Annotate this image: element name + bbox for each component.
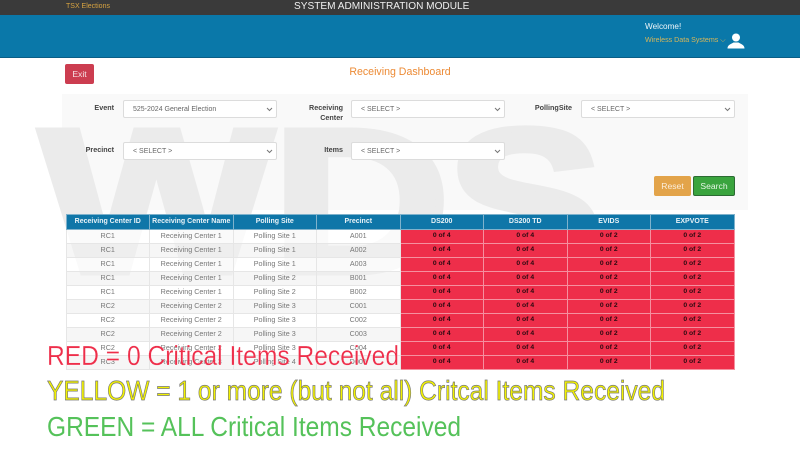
data table: Receiving Center Name — [152, 218, 230, 225]
data table: 0 of 2 — [683, 274, 701, 281]
data table: Polling Site 1 — [254, 259, 296, 268]
data table: 0 of 4 — [516, 330, 534, 337]
data table: 0 of 4 — [516, 260, 534, 267]
data table: Receiving Center 1 — [161, 245, 222, 254]
receiving center label: Receiving Center — [309, 103, 343, 122]
data table: 0 of 2 — [683, 302, 701, 309]
data table: 0 of 2 — [600, 330, 618, 337]
data table: 0 of 4 — [433, 344, 451, 351]
brand label: TSX Elections — [66, 3, 110, 10]
data table: 0 of 4 — [433, 260, 451, 267]
data table: B002 — [350, 287, 367, 296]
data table: Receiving Center 2 — [161, 315, 222, 324]
data table: Receiving Center 1 — [161, 231, 222, 240]
data table: 0 of 4 — [433, 302, 451, 309]
blue header band — [0, 15, 800, 58]
data table: 0 of 2 — [600, 260, 618, 267]
data table: 0 of 4 — [516, 316, 534, 323]
data table — [66, 214, 735, 370]
data table: EXPVOTE — [676, 218, 709, 225]
data table: Receiving Center 1 — [161, 287, 222, 296]
data table: Polling Site 3 — [254, 301, 296, 310]
data table: 0 of 2 — [600, 288, 618, 295]
items label: Items — [324, 145, 343, 154]
data table: 0 of 4 — [516, 232, 534, 239]
data table: 0 of 2 — [600, 232, 618, 239]
precinct label: Precinct — [86, 145, 114, 154]
data table: 0 of 4 — [516, 288, 534, 295]
data table: DS200 TD — [509, 218, 542, 225]
data table: 0 of 2 — [683, 288, 701, 295]
exit button — [65, 64, 94, 84]
data table: RC2 — [101, 329, 115, 338]
search button — [693, 176, 735, 196]
receiving center select: < SELECT > — [361, 106, 400, 113]
legend: red: RED = 0 Critical Items Received — [47, 340, 399, 371]
filter panel background — [62, 94, 748, 210]
data table: C002 — [350, 315, 367, 324]
filter: event — [94, 100, 735, 122]
event select: 525-2024 General Election — [133, 106, 216, 113]
data table: Polling Site 4 — [254, 357, 296, 366]
data table: Polling Site 3 — [254, 343, 296, 352]
precinct select — [123, 142, 277, 160]
data table: Receiving Center 1 — [161, 273, 222, 282]
data table: Polling Site 3 — [254, 329, 296, 338]
data table: C003 — [350, 329, 367, 338]
data table: 0 of 2 — [600, 316, 618, 323]
data table: 0 of 4 — [433, 358, 451, 365]
data table: 0 of 2 — [600, 344, 618, 351]
polling site label: PollingSite — [535, 103, 572, 112]
data table: 0 of 4 — [433, 288, 451, 295]
icon: user — [728, 34, 744, 48]
receiving center select — [351, 100, 505, 118]
top bar — [0, 0, 800, 15]
data table: 0 of 2 — [683, 246, 701, 253]
data table: RC2 — [101, 315, 115, 324]
data table: RC1 — [101, 287, 115, 296]
legend: green: GREEN = ALL Critical Items Received — [47, 411, 461, 442]
reset button: Reset — [661, 181, 684, 191]
event label: Event — [94, 103, 114, 112]
data table: C004 — [350, 343, 367, 352]
data table: 0 of 4 — [433, 330, 451, 337]
data table: D001 — [350, 357, 367, 366]
data table: Polling Site 1 — [254, 245, 296, 254]
data table: Polling Site 2 — [254, 287, 296, 296]
items select: < SELECT > — [361, 148, 400, 155]
legend: yellow: YELLOW = 1 or more (but not all) Critcal Items Received — [47, 375, 665, 406]
data table: RC1 — [101, 231, 115, 240]
page heading: Receiving Dashboard — [349, 66, 451, 78]
data table: DS200 — [431, 218, 452, 225]
data table: 0 of 2 — [683, 344, 701, 351]
data table: A001 — [350, 231, 367, 240]
watermark — [35, 90, 603, 316]
data table: Precinct — [344, 218, 372, 225]
data table: Receiving Center 2 — [161, 301, 222, 310]
search button: Search — [700, 181, 728, 191]
data table: Polling Site — [256, 218, 294, 225]
watermark: S — [447, 90, 603, 316]
filter: precinct and items — [86, 142, 505, 160]
data table: RC1 — [101, 259, 115, 268]
data table: 0 of 4 — [433, 316, 451, 323]
user name: Wireless Data Systems ⌵ — [645, 36, 726, 44]
polling site select — [581, 100, 735, 118]
data table: Receiving Center 2 — [161, 343, 222, 352]
data table: RC3 — [101, 357, 115, 366]
data table: 0 of 2 — [600, 302, 618, 309]
welcome text: Welcome! — [645, 22, 681, 31]
data table: RC2 — [101, 343, 115, 352]
data table: A003 — [350, 259, 367, 268]
data table: Receiving Center 1 — [161, 259, 222, 268]
data table: 0 of 4 — [516, 302, 534, 309]
data table: 0 of 2 — [683, 330, 701, 337]
data table: Receiving Center 2 — [161, 329, 222, 338]
data table: 0 of 4 — [433, 246, 451, 253]
exit button: Exit — [72, 69, 87, 79]
data table: 0 of 4 — [433, 232, 451, 239]
data table: 0 of 2 — [600, 246, 618, 253]
data table: 0 of 2 — [683, 260, 701, 267]
event select — [123, 100, 277, 118]
data table: Polling Site 2 — [254, 273, 296, 282]
colour legend — [47, 340, 665, 442]
data table: 0 of 4 — [433, 274, 451, 281]
data table: 0 of 4 — [516, 246, 534, 253]
data table: 0 of 2 — [683, 358, 701, 365]
data table: Polling Site 1 — [254, 231, 296, 240]
data table: Receiving Center ID — [75, 218, 141, 225]
data table: EVIDS — [598, 218, 619, 225]
polling site select: < SELECT > — [591, 106, 630, 113]
data table: Receiving Center 3 — [161, 357, 222, 366]
data table: 0 of 2 — [600, 358, 618, 365]
data table: 0 of 2 — [683, 316, 701, 323]
data table: 0 of 4 — [516, 358, 534, 365]
precinct select: < SELECT > — [133, 148, 172, 155]
data table: B001 — [350, 273, 367, 282]
items select — [351, 142, 505, 160]
data table: Polling Site 3 — [254, 315, 296, 324]
reset button — [654, 176, 691, 196]
data table: RC1 — [101, 245, 115, 254]
module title: SYSTEM ADMINISTRATION MODULE — [294, 1, 469, 12]
data table: A002 — [350, 245, 367, 254]
watermark: D — [272, 90, 450, 316]
data table: 0 of 2 — [600, 274, 618, 281]
watermark: W — [40, 90, 274, 316]
data table: RC2 — [101, 301, 115, 310]
data table: 0 of 4 — [516, 274, 534, 281]
data table: 0 of 4 — [516, 344, 534, 351]
data table: C001 — [350, 301, 367, 310]
data table: RC1 — [101, 273, 115, 282]
data table: 0 of 2 — [683, 232, 701, 239]
